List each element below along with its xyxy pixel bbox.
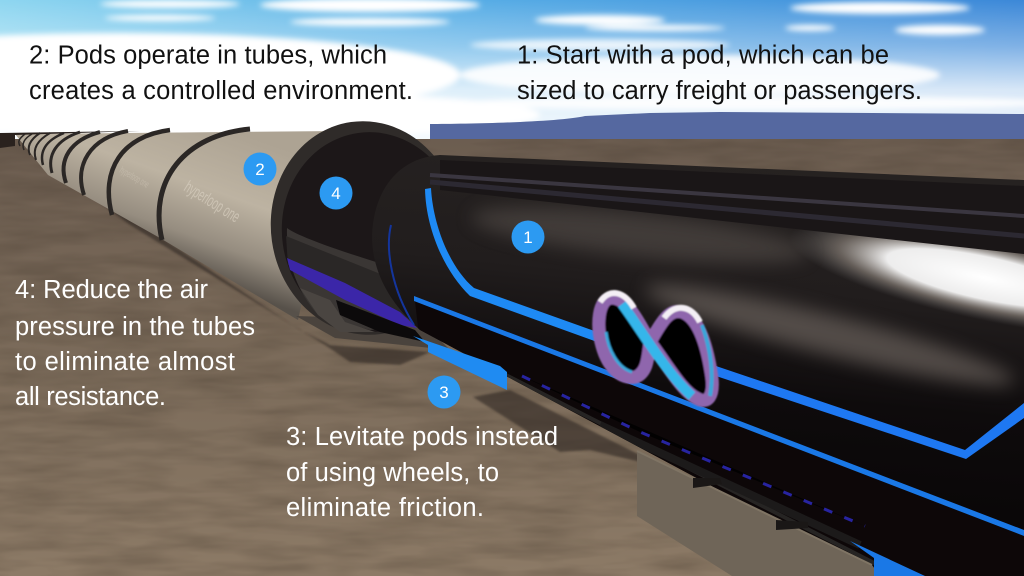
- marker 2: [244, 152, 276, 186]
- caption 1: pod: sized to carry freight or passengers.: [517, 77, 922, 105]
- tube and rail shadow on ground: [30, 150, 640, 462]
- panel: hyperloop tube: [0, 129, 340, 320]
- panel: pod: [372, 155, 1024, 576]
- marker 4: 4: [331, 184, 341, 203]
- marker 2: 2: [255, 160, 265, 179]
- caption 4: air pressure: [15, 276, 255, 411]
- underside track: [415, 302, 716, 488]
- caption 4: air pressure: all resistance.: [15, 383, 166, 411]
- caption 4: air pressure: pressure in the tubes: [15, 313, 255, 341]
- blue levitation foot: [413, 336, 507, 390]
- panel: open tube end: [257, 109, 475, 350]
- marker 3: 3: [439, 383, 449, 402]
- caption 1: pod: [517, 42, 922, 105]
- caption 1: pod: 1: Start with a pod, which can be: [517, 42, 889, 70]
- caption 3: levitation: 3: Levitate pods instead: [286, 423, 558, 451]
- track rail clamps: [693, 478, 808, 530]
- caption 3: levitation: [286, 423, 558, 522]
- sky background with clouds: [0, 0, 1024, 145]
- marker 3: [428, 376, 460, 408]
- caption 2: tubes: 2: Pods operate in tubes, which: [29, 42, 387, 70]
- thin blue line: [414, 296, 1024, 536]
- caption 2: tubes: [29, 42, 413, 105]
- icon: infinity logo: [599, 293, 712, 400]
- desert ground: [0, 139, 1024, 576]
- concrete pylon: [637, 451, 880, 576]
- blue edge strip: [389, 225, 414, 325]
- marker 1: [512, 220, 544, 254]
- marker 4: [320, 176, 352, 210]
- distant mountains: [430, 112, 1024, 142]
- blue track end: [850, 541, 925, 576]
- pod roof rails: [440, 160, 1024, 254]
- caption 3: levitation: of using wheels, to: [286, 459, 499, 487]
- caption 3: levitation: eliminate friction.: [286, 494, 484, 522]
- pod highlights: [644, 277, 1018, 394]
- tube segment rings: [19, 129, 250, 240]
- caption 4: air pressure: to eliminate almost: [15, 348, 235, 376]
- blue stripe: [425, 188, 600, 343]
- linear motor strip: [287, 258, 417, 328]
- caption 2: tubes: creates a controlled environment.: [29, 77, 413, 105]
- marker 1: 1: [523, 228, 533, 247]
- tube logo text: hyperloop one: [181, 177, 244, 226]
- caption 4: air pressure: 4: Reduce the air: [15, 276, 208, 304]
- panel: hyperloop tube: hyperloop one: [118, 165, 151, 191]
